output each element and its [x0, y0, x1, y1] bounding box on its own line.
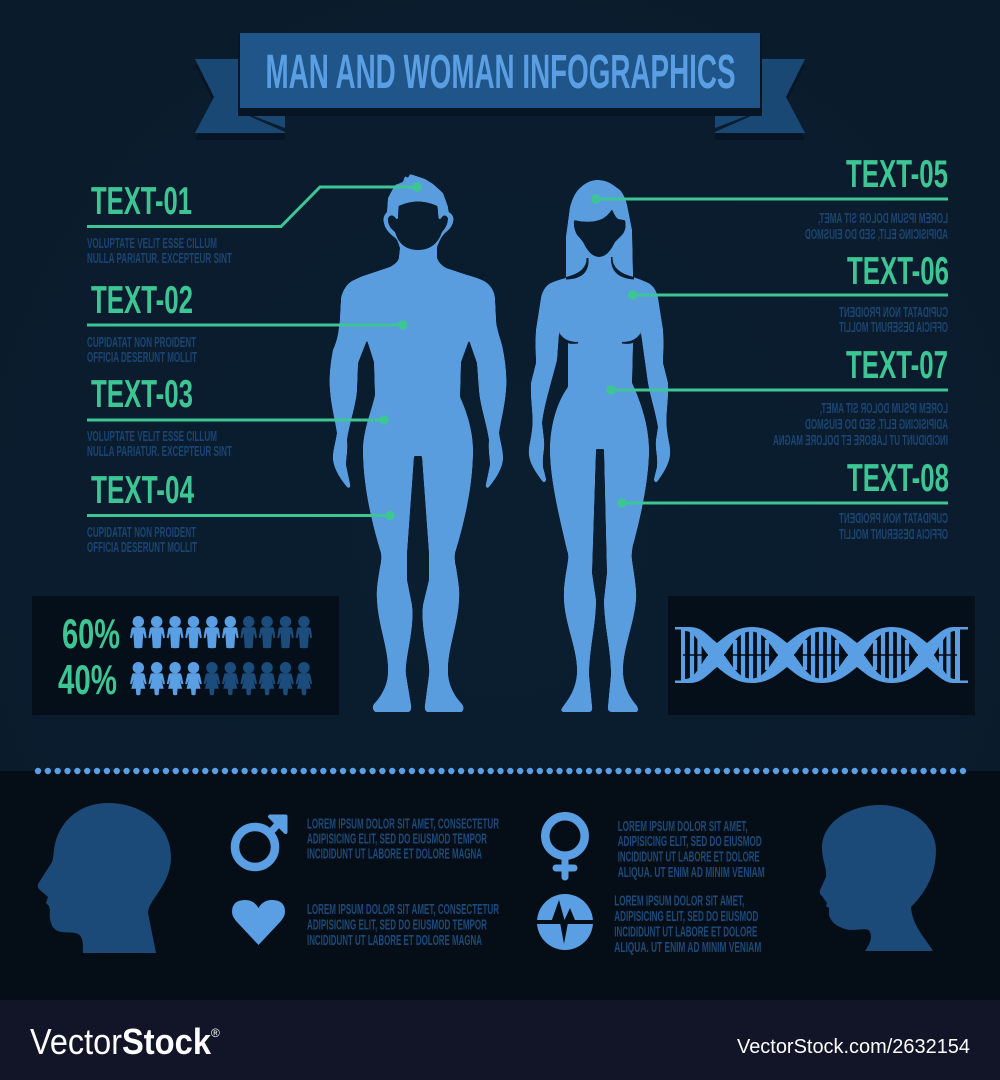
callout: text-03 [87, 373, 389, 460]
callout: text-07 [606, 344, 948, 449]
panel: gender percentages [32, 596, 339, 715]
description text-03 [87, 429, 232, 460]
mirrored description text-07: LOREM IPSUM DOLOR SIT AMET, [820, 401, 948, 417]
text block: female: ALIQUA. UT ENIM AD MINIM VENIAM [618, 865, 765, 881]
footer logo [30, 1021, 220, 1062]
men pictogram row [130, 616, 312, 648]
text block: female: ADIPISICING ELIT, SED DO EIUSMOD [618, 834, 762, 850]
leader line text-06 [628, 290, 948, 300]
callout: text-05 [591, 153, 948, 243]
mirrored description text-08 [839, 511, 948, 543]
mirrored description text-06: OFFICIA DESERUNT MOLLIT [839, 320, 948, 336]
leader line text-01 [87, 182, 422, 226]
man head profile [38, 803, 171, 953]
man silhouette [330, 174, 506, 712]
woman silhouette [529, 180, 670, 712]
dna helix [675, 627, 968, 683]
icon: pulse circle [536, 894, 594, 950]
mirrored description text-05: LOREM IPSUM DOLOR SIT AMET, [818, 211, 948, 227]
text block: female [618, 819, 765, 881]
40 percent label: 40% [58, 656, 117, 703]
icon: male symbol [235, 816, 286, 867]
60 percent label: 60% [62, 610, 120, 657]
description text-02 [87, 335, 197, 366]
text block: pulse: ADIPISICING ELIT, SED DO EIUSMOD [614, 909, 758, 925]
text block: female: LOREM IPSUM DOLOR SIT AMET, [618, 819, 748, 835]
leader line text-07 [606, 385, 948, 395]
heading text-03: TEXT-03 [91, 373, 193, 416]
ribbon main band [238, 33, 762, 116]
text block: pulse [614, 894, 761, 956]
title ribbon [195, 33, 805, 140]
description text-04: OFFICIA DESERUNT MOLLIT [87, 540, 197, 556]
description text-04: CUPIDATAT NON PROIDENT [87, 525, 196, 541]
callout: text-06 [628, 250, 949, 336]
ribbon right tail [715, 59, 805, 140]
text block: heart: INCIDIDUNT UT LABORE ET DOLORE MAGNA [307, 933, 482, 949]
text block: pulse: INCIDIDUNT UT LABORE ET DOLORE [614, 924, 757, 940]
description text-03: VOLUPTATE VELIT ESSE CILLUM [87, 429, 217, 445]
mirrored description text-05: ADIPISICING ELIT, SED DO EIUSMOD [805, 227, 948, 243]
heading text-06: TEXT-06 [847, 250, 949, 293]
panel: dna [668, 596, 975, 715]
text block: pulse: LOREM IPSUM DOLOR SIT AMET, [614, 894, 744, 910]
callout: text-02 [87, 279, 408, 366]
description text-01: VOLUPTATE VELIT ESSE CILLUM [87, 236, 217, 252]
ribbon left tail [195, 59, 285, 140]
icon: female symbol [545, 816, 585, 877]
description text-01: NULLA PARIATUR. EXCEPTEUR SINT [87, 251, 232, 267]
heading text-02: TEXT-02 [91, 279, 193, 322]
mirrored description text-08: OFFICIA DESERUNT MOLLIT [839, 527, 948, 543]
description text-03: NULLA PARIATUR. EXCEPTEUR SINT [87, 444, 232, 460]
footer image id: VectorStock.com/2632154 [737, 1036, 970, 1058]
leader line text-04 [87, 511, 395, 520]
woman head profile [820, 805, 936, 951]
heading text-05: TEXT-05 [846, 153, 948, 196]
mirrored description text-06 [839, 305, 948, 336]
mirrored description text-07: INCIDIDUNT UT LABORE ET DOLORE MAGNA [773, 433, 948, 449]
footer logo: Vector [30, 1021, 122, 1062]
mirrored description text-06: CUPIDATAT NON PROIDENT [839, 305, 948, 321]
icon: heart [232, 900, 285, 945]
heading text-07: TEXT-07 [846, 344, 948, 387]
leader line text-05 [591, 194, 948, 204]
mirrored description text-08: CUPIDATAT NON PROIDENT [839, 511, 948, 527]
leader line text-03 [87, 415, 389, 425]
heading text-01: TEXT-01 [91, 180, 192, 223]
text block: male: ADIPISICING ELIT, SED DO EIUSMOD TEMPOR [307, 832, 487, 848]
mirrored description text-07: ADIPISICING ELIT, SED DO EIUSMOD [805, 417, 948, 433]
footer logo: ® [211, 1026, 220, 1040]
footer logo: Stock [122, 1021, 212, 1062]
description text-02: OFFICIA DESERUNT MOLLIT [87, 350, 197, 366]
dotted divider [38, 768, 963, 774]
heading text-08: TEXT-08 [847, 457, 949, 500]
callout: text-04 [87, 469, 395, 556]
callout: text-01 [87, 180, 422, 267]
bottom band [0, 771, 1000, 1000]
leader line text-02 [87, 320, 408, 330]
text block: pulse: ALIQUA. UT ENIM AD MINIM VENIAM [614, 940, 761, 956]
mirrored description text-05 [805, 211, 948, 243]
description text-04 [87, 525, 197, 556]
text block: heart [307, 902, 499, 949]
heading text-04: TEXT-04 [91, 469, 194, 512]
mirrored description text-07 [773, 401, 948, 449]
text block: male: LOREM IPSUM DOLOR SIT AMET, CONSECTETUR [307, 816, 499, 832]
footer bar [0, 1000, 1000, 1080]
text block: female: INCIDIDUNT UT LABORE ET DOLORE [618, 850, 760, 866]
women pictogram row [130, 662, 312, 695]
text block: male: INCIDIDUNT UT LABORE ET DOLORE MAGNA [307, 846, 482, 862]
callout: text-08 [617, 457, 949, 543]
text block: heart: LOREM IPSUM DOLOR SIT AMET, CONSECTETUR [307, 902, 499, 918]
text block: heart: ADIPISICING ELIT, SED DO EIUSMOD TEMPOR [307, 918, 487, 934]
text block: male [307, 816, 499, 862]
description text-02: CUPIDATAT NON PROIDENT [87, 335, 196, 351]
leader line text-08 [617, 498, 948, 508]
description text-01 [87, 236, 232, 267]
